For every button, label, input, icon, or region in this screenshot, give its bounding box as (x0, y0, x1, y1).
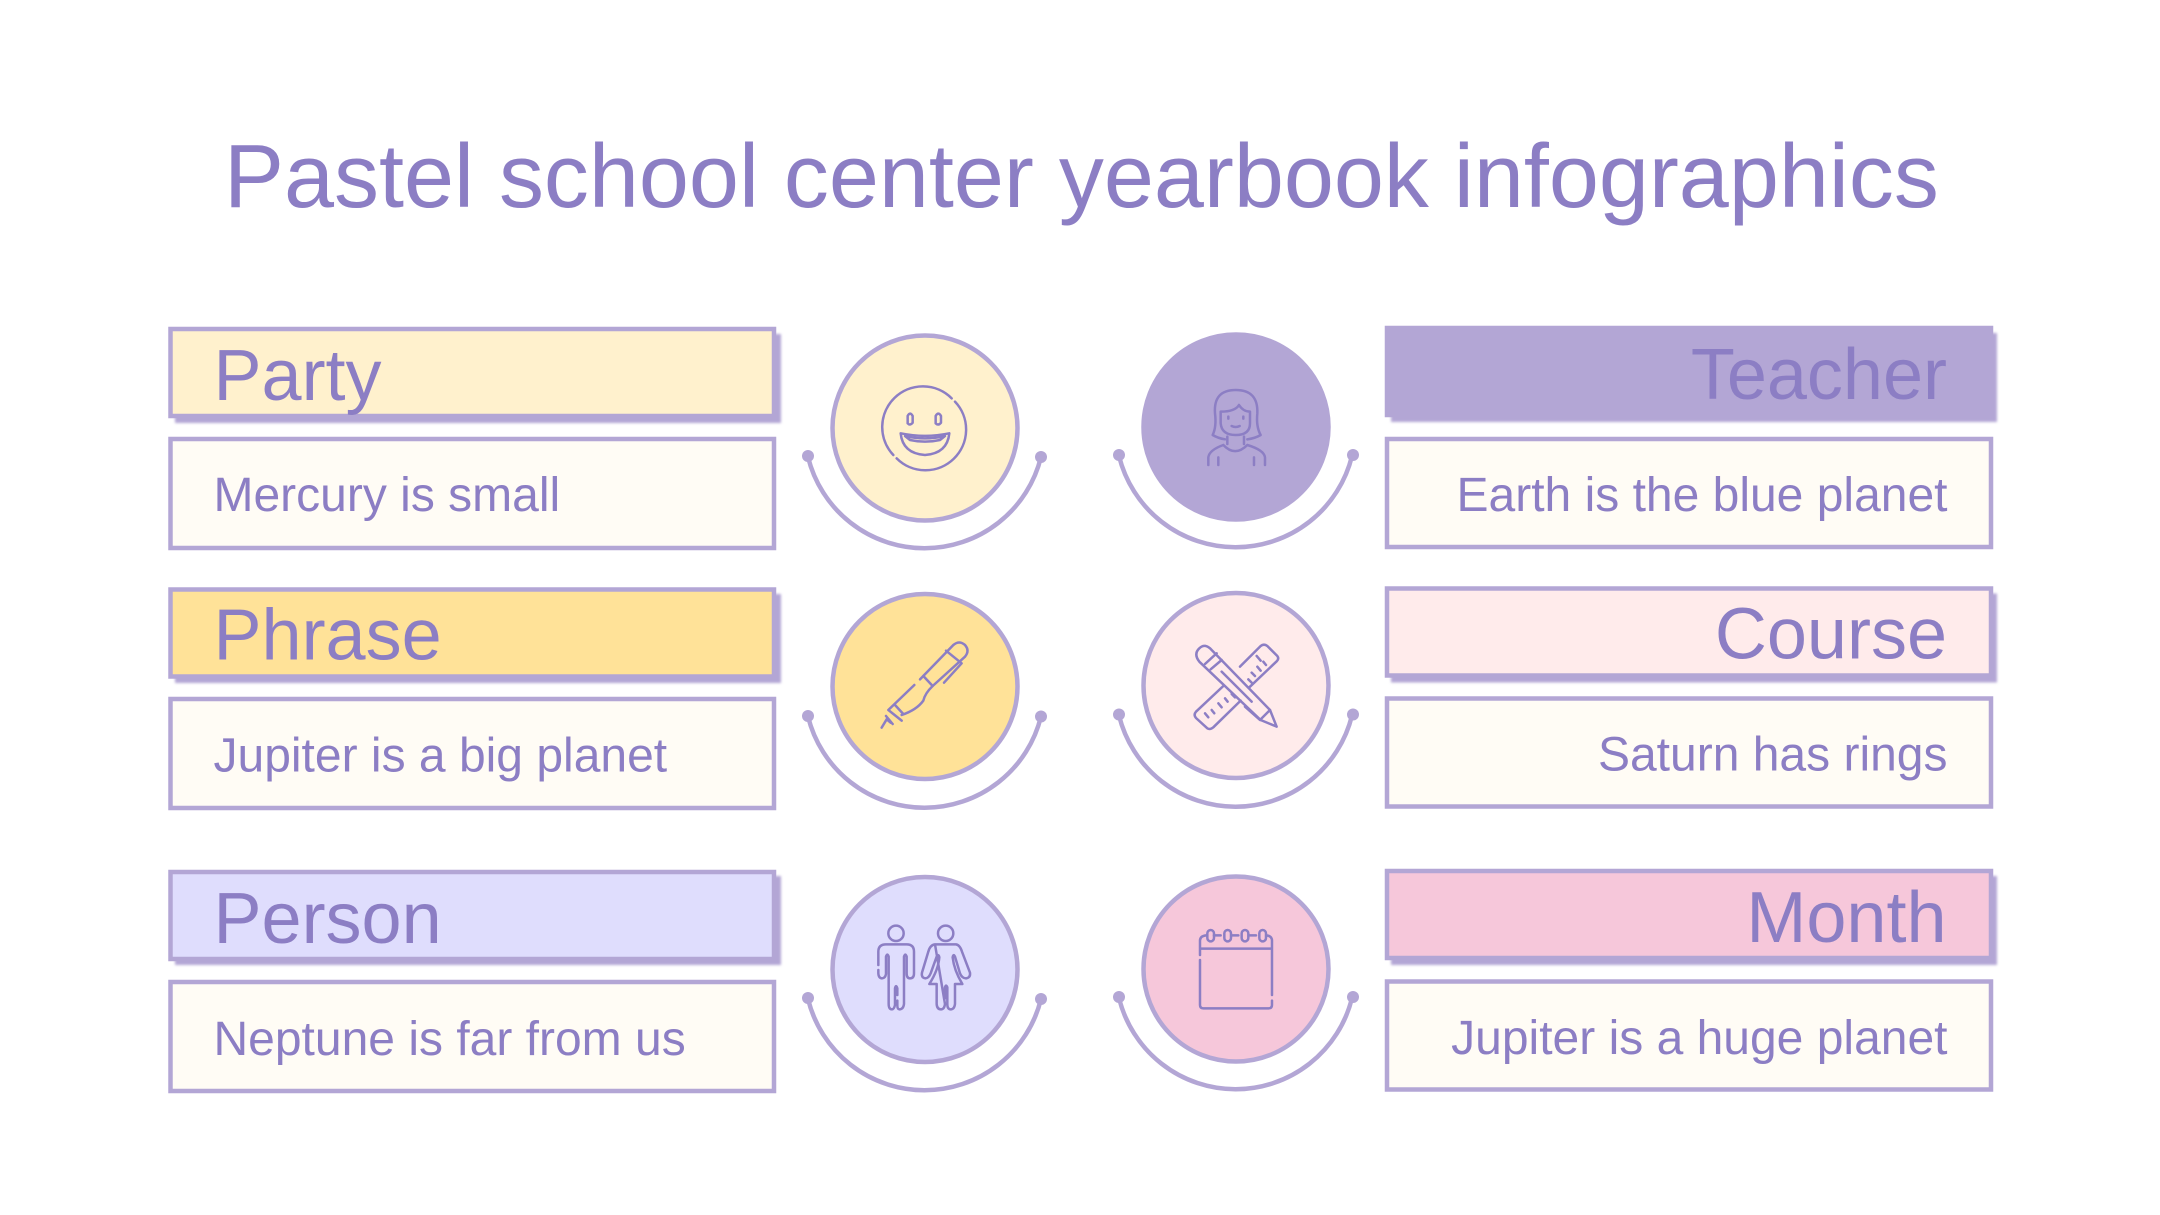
circle: Course (1144, 593, 1328, 778)
panel: Phrase (170, 590, 1047, 808)
text: Neptune is far from us (170, 982, 774, 1091)
arc: Person (802, 992, 1047, 1090)
text: Earth is the blue planet (1387, 439, 1991, 547)
text: Mercury is small: Mercury is small (214, 469, 560, 522)
text: Mercury is small (170, 439, 774, 548)
text: Neptune is far from us: Neptune is far from us (214, 1013, 686, 1066)
text: Saturn has rings (1387, 698, 1991, 806)
arc: Month (1113, 991, 1359, 1089)
arc: Phrase (802, 710, 1047, 808)
heading: Phrase: Phrase (214, 596, 442, 676)
heading: Teacher (1387, 328, 1997, 422)
arc: Teacher (1113, 449, 1359, 547)
circle: Person (832, 877, 1018, 1062)
heading: Party: Party (214, 336, 382, 416)
heading: Person (170, 872, 781, 965)
icon: pen (882, 642, 967, 728)
heading: Party (170, 329, 781, 423)
text: Saturn has rings: Saturn has rings (1598, 728, 1948, 782)
heading: Teacher: Teacher (1691, 335, 1947, 415)
panel: Teacher (1113, 328, 1997, 547)
text: Earth is the blue planet: Earth is the blue planet (1456, 469, 1948, 522)
text: Jupiter is a big planet: Jupiter is a big planet (214, 730, 667, 782)
panel: Party (170, 329, 1047, 548)
heading: Month: Month (1746, 878, 1946, 958)
icon: man and woman (878, 926, 970, 1009)
icon: smiling face (882, 386, 966, 470)
panel: Course (1113, 588, 1997, 807)
circle: Party (832, 336, 1018, 520)
heading: Course: Course (1715, 594, 1947, 674)
title: Pastel school center yearbook infographics (224, 127, 1939, 227)
heading: Person: Person (214, 879, 442, 959)
icon: teacher (1208, 390, 1265, 465)
heading: Course (1387, 588, 1997, 682)
text: Jupiter is a huge planet: Jupiter is a huge planet (1451, 1012, 1948, 1065)
circle: Phrase (832, 594, 1018, 779)
icon: pencil and ruler (1195, 645, 1278, 729)
arc: Party (802, 450, 1047, 548)
heading: Month (1387, 871, 1997, 965)
panel: Month (1113, 871, 1997, 1090)
circle: Month (1144, 876, 1328, 1062)
text: Jupiter is a big planet (170, 699, 774, 808)
icon: calendar (1200, 930, 1272, 1008)
text: Jupiter is a huge planet (1387, 982, 1991, 1090)
panel: Person (170, 872, 1047, 1091)
heading: Phrase (170, 590, 781, 683)
arc: Course (1113, 708, 1359, 807)
circle: Teacher (1144, 334, 1328, 520)
